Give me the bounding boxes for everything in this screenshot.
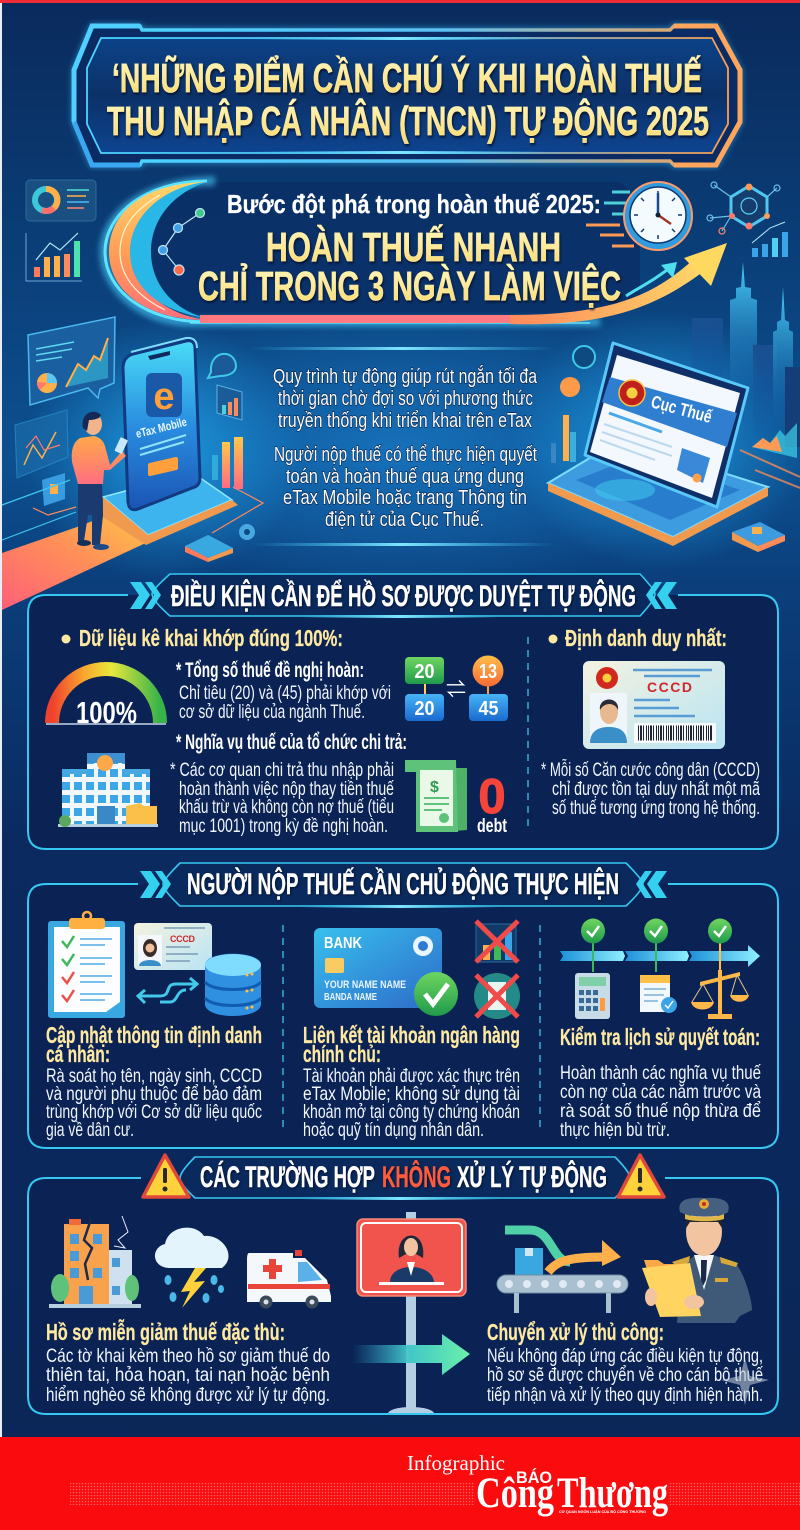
paragraph 1: truyền thống khi triển khai trên eTax: [278, 410, 532, 432]
icon: bar chart: [26, 233, 82, 281]
tablet: [585, 343, 748, 507]
item: paying organisation: mục 1001) trong kỳ đề nghị hoàn.: [179, 815, 388, 837]
left text: Các tờ khai kèm theo hồ sơ giảm thuế do: [46, 1345, 330, 1367]
icon: ID card: [134, 923, 212, 970]
paragraph 1: thời gian chờ đợi so với phương thức: [278, 388, 533, 410]
item: paying organisation: khấu trừ và không còn nợ thuế (tiểu: [179, 796, 394, 818]
paragraph 2: eTax Mobile hoặc trang Thông tin: [283, 487, 527, 509]
section heading: [130, 574, 677, 618]
item: paying organisation: hoàn thành việc nộp thay tiền thuế: [179, 778, 394, 800]
column 2 text: Liên kết tài khoản ngân hàng: [303, 1022, 520, 1048]
second chart card: [15, 410, 68, 478]
logo: Báo Công Thương: CƠ QUAN NGÔN LUẬN CỦA BỘ CÔNG THƯƠNG: [559, 1509, 646, 1514]
right text: Chuyển xử lý thủ công:: [487, 1319, 664, 1345]
number boxes: ⇌: [446, 679, 466, 701]
floating chart card: [28, 317, 115, 405]
item: total tax: [176, 659, 391, 723]
column 1 text: trùng khớp với Cơ sở dữ liệu quốc: [46, 1101, 262, 1123]
tablet: Cục Thuế: [649, 392, 715, 427]
icon: tax officer: [642, 1198, 752, 1323]
subheading: unique id: Định danh duy nhất:: [565, 625, 727, 651]
icon: ID card: CCCD: [170, 934, 196, 944]
signpost: [352, 1212, 470, 1413]
item: total tax: cơ sở dữ liệu của ngành Thuế.: [179, 701, 365, 723]
section heading: CÁC TRƯỜNG HỢP: [200, 1160, 375, 1194]
clock: [624, 182, 692, 250]
paragraph 1: Quy trình tự động giúp rút ngắn tối đa: [273, 365, 538, 388]
icon: small rising chart: [752, 222, 788, 257]
item: paying organisation: * Các cơ quan chi trả thu nhập phải: [170, 759, 394, 781]
column 1 text: cá nhân:: [46, 1041, 110, 1067]
phone: e: [153, 376, 175, 418]
icon: bank card: YOUR NAME NAME: [324, 979, 406, 991]
left text: Hồ sơ miễn giảm thuế đặc thù:: [46, 1318, 285, 1345]
city skyline: [692, 262, 800, 488]
icon: crossed credit fund: [474, 973, 520, 1019]
title banner: [74, 26, 740, 165]
right illustration: Cục Thuế tablet: [548, 343, 785, 552]
coin: [560, 377, 580, 397]
phone: [123, 338, 200, 510]
section heading: KHÔNG: [382, 1160, 451, 1194]
left text: hiểm nghèo sẽ không được xử lý tự động.: [46, 1384, 330, 1406]
right text: [487, 1319, 763, 1406]
subheading: unique id: [548, 625, 727, 651]
subheading: data match: Dữ liệu kê khai khớp đúng 100%:: [79, 625, 343, 651]
panel: taxpayer actions: [28, 863, 778, 1148]
column 2 text: khoản mở tại công ty chứng khoán: [303, 1101, 520, 1123]
circuit lines: [2, 480, 263, 540]
panel: conditions: [28, 574, 778, 849]
left text: thiên tai, hỏa hoạn, tai nạn hoặc bệnh: [46, 1364, 330, 1386]
column 1 text: gia về dân cư.: [46, 1119, 134, 1141]
side bars: [208, 354, 243, 489]
icon: calculator: [575, 973, 610, 1019]
note: unique id: [541, 758, 760, 819]
item: paying organisation: * Nghĩa vụ thuế của tổ chức chi trả:: [176, 731, 407, 754]
phone: eTax Mobile: [134, 415, 188, 441]
chip block: [185, 535, 233, 562]
column 3 text: thực hiện bù trừ.: [560, 1119, 670, 1141]
icon: bank card: [314, 928, 458, 1016]
dotted band: [70, 1483, 800, 1505]
chip block: [732, 522, 785, 552]
zero debt: 0: [478, 770, 506, 824]
column 3 text: rà soát số thuế nộp thừa để: [560, 1100, 761, 1122]
icon: crossed stock chart: [476, 921, 518, 962]
section heading: XỬ LÝ TỰ ĐỘNG: [457, 1160, 607, 1194]
icon: storm cloud: [155, 1228, 229, 1308]
hero headline line 1: HOÀN THUẾ NHANH: [266, 224, 561, 270]
left text: [46, 1318, 330, 1406]
person: [72, 412, 128, 550]
icon: office building: [58, 753, 158, 827]
subheading: data match: [62, 625, 343, 651]
icon: document: [640, 975, 677, 1013]
icon: warning right: [618, 1155, 664, 1197]
icon: CCCD card: [583, 661, 725, 749]
icon: network hexagon: [707, 182, 780, 234]
gauge 100%: 100%: [76, 695, 137, 730]
number boxes: 45: [478, 698, 498, 720]
icon: warning left: [143, 1155, 189, 1197]
section heading: [140, 863, 667, 908]
item: total tax: Chỉ tiêu (20) và (45) phải khớp với: [179, 682, 391, 704]
icon: bank card: BANK: [324, 935, 362, 952]
icon: bank card: BANDA NAME: [324, 992, 377, 1003]
swoosh: [104, 181, 708, 324]
gear icon: [239, 524, 255, 540]
paragraph 1: [273, 365, 538, 432]
icon: CCCD card: CCCD: [647, 679, 692, 695]
platform: [548, 440, 768, 537]
node chain: [158, 208, 204, 275]
footer banner: [0, 1437, 800, 1530]
zero debt: debt: [477, 816, 508, 837]
arrow head: [684, 243, 727, 286]
number boxes: 20: [414, 698, 434, 720]
column 1 text: Cập nhật thông tin định danh: [46, 1022, 262, 1048]
paragraph 2: điện tử của Cục Thuế.: [325, 509, 484, 531]
logo: Báo Công Thương: Thương: [557, 1470, 668, 1517]
section heading: [180, 1157, 630, 1200]
column 3 text: [560, 1024, 761, 1141]
intro text block: [250, 347, 555, 546]
paragraph 2: Người nộp thuế có thể thực hiện quyết: [274, 444, 537, 466]
globe bubble: [573, 346, 595, 368]
panel: non-automatic cases: [28, 1155, 778, 1414]
column 1 text: và người phụ thuộc để bảo đảm: [46, 1083, 262, 1105]
icon: tax bill: [405, 760, 467, 832]
icon: donut chart card: [26, 180, 96, 221]
column 1 text: Rà soát họ tên, ngày sinh, CCCD: [46, 1065, 262, 1087]
side bars: [551, 415, 576, 463]
icon: conveyor and routing arrow: [497, 1230, 628, 1313]
walkway: [2, 517, 150, 610]
column 2 text: chính chủ:: [303, 1041, 381, 1067]
number boxes: [405, 656, 508, 721]
logo: Báo Công Thương: [476, 1468, 668, 1517]
sparkle: [721, 1358, 769, 1405]
logo: Báo Công Thương: BÁO: [516, 1468, 552, 1487]
column 2 text: hoặc quỹ tín dụng nhân dân.: [303, 1119, 484, 1141]
column 2 text: Tài khoản phải được xác thực trên: [303, 1065, 520, 1087]
icon: cracked building: [49, 1216, 141, 1308]
hero headline line 2: CHỈ TRONG 3 NGÀY LÀM VIỆC: [198, 263, 621, 309]
column 1 text: [46, 1022, 262, 1141]
icon: tax bill: $: [430, 779, 439, 796]
item: paying organisation: [170, 731, 407, 837]
icon: timeline: [560, 918, 760, 972]
hero banner with swoosh arrow: [104, 181, 727, 324]
logo: Báo Công Thương: Công: [476, 1470, 554, 1517]
small tile: [42, 473, 65, 506]
paragraph 2: [274, 444, 537, 531]
column 2 text: [303, 1022, 520, 1141]
hero inner fill: [140, 182, 640, 318]
left illustration: charts and eTax Mobile phone: [2, 317, 263, 562]
icon: database: [205, 954, 261, 1016]
number boxes: 13: [479, 661, 497, 683]
icon: checklist clipboard: [48, 912, 125, 1018]
icon: scales: [691, 970, 749, 1019]
item: total tax: * Tổng số thuế đề nghị hoàn:: [176, 659, 364, 682]
icon: sync arrows: [138, 978, 197, 1003]
number boxes: 20: [414, 661, 434, 683]
label: Infographic: Infographic: [407, 1451, 505, 1475]
icon: ambulance: [247, 1250, 331, 1308]
speed lines: [586, 192, 634, 246]
hero subtitle: Bước đột phá trong hoàn thuế 2025:: [227, 189, 601, 219]
platform: [103, 473, 232, 535]
gauge 100%: [46, 669, 166, 730]
column 2 text: eTax Mobile; không sử dụng tài: [303, 1083, 520, 1105]
paragraph 2: toán và hoàn thuế qua ứng dụng: [286, 466, 524, 488]
